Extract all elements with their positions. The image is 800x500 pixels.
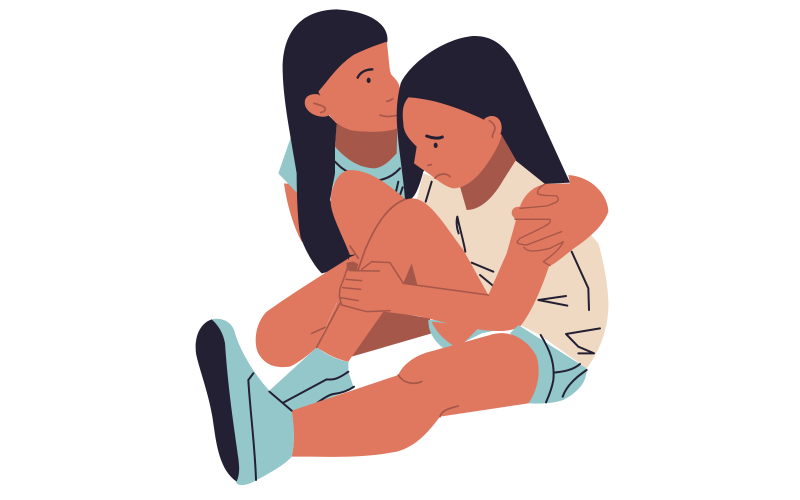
shoe [210, 319, 294, 485]
back girl: shirt chest [333, 128, 407, 200]
knee outline [312, 199, 405, 347]
raised shin and front knee [317, 198, 488, 362]
back girl: arm around friend and hand [507, 175, 608, 267]
back girl: ear [305, 94, 332, 117]
front girl: hugging arm and fist [339, 220, 552, 331]
front leg [292, 333, 539, 457]
back girl: eye [367, 78, 371, 83]
front girl: face [403, 97, 502, 188]
back girl: shirt sleeve [278, 133, 317, 197]
shoe sole [196, 319, 239, 482]
front girl: shorts [510, 325, 587, 404]
front leg creases [398, 375, 458, 417]
front girl: eye [434, 143, 438, 148]
front girl: thigh under arm [432, 322, 480, 347]
front girl: hair [397, 36, 570, 200]
back girl: hair [283, 9, 387, 273]
back girl: eyebrow [358, 69, 372, 78]
front girl: eyebrow [427, 136, 442, 138]
front girl: nose and frown [428, 165, 450, 178]
front girl: shorts back [428, 320, 520, 351]
front girl: shirt lines [426, 182, 600, 353]
sock of raised leg [269, 347, 354, 411]
back girl: nose and smile [380, 99, 397, 117]
front girl: ear [484, 116, 502, 139]
shoe lines [248, 373, 292, 480]
shorts lines [541, 335, 587, 402]
shin dark patches [347, 262, 417, 285]
back girl: neck shadow [335, 120, 397, 168]
back girl: face [318, 42, 400, 132]
front girl: shirt [417, 160, 608, 368]
back girl: thigh [256, 258, 350, 367]
back girl: arm [284, 183, 323, 253]
back leg: shin shadow [352, 310, 432, 357]
back knee [331, 170, 407, 255]
sock lines [283, 372, 354, 403]
front girl: neck shadow [457, 135, 516, 210]
back girl: shirt lines [335, 162, 403, 195]
